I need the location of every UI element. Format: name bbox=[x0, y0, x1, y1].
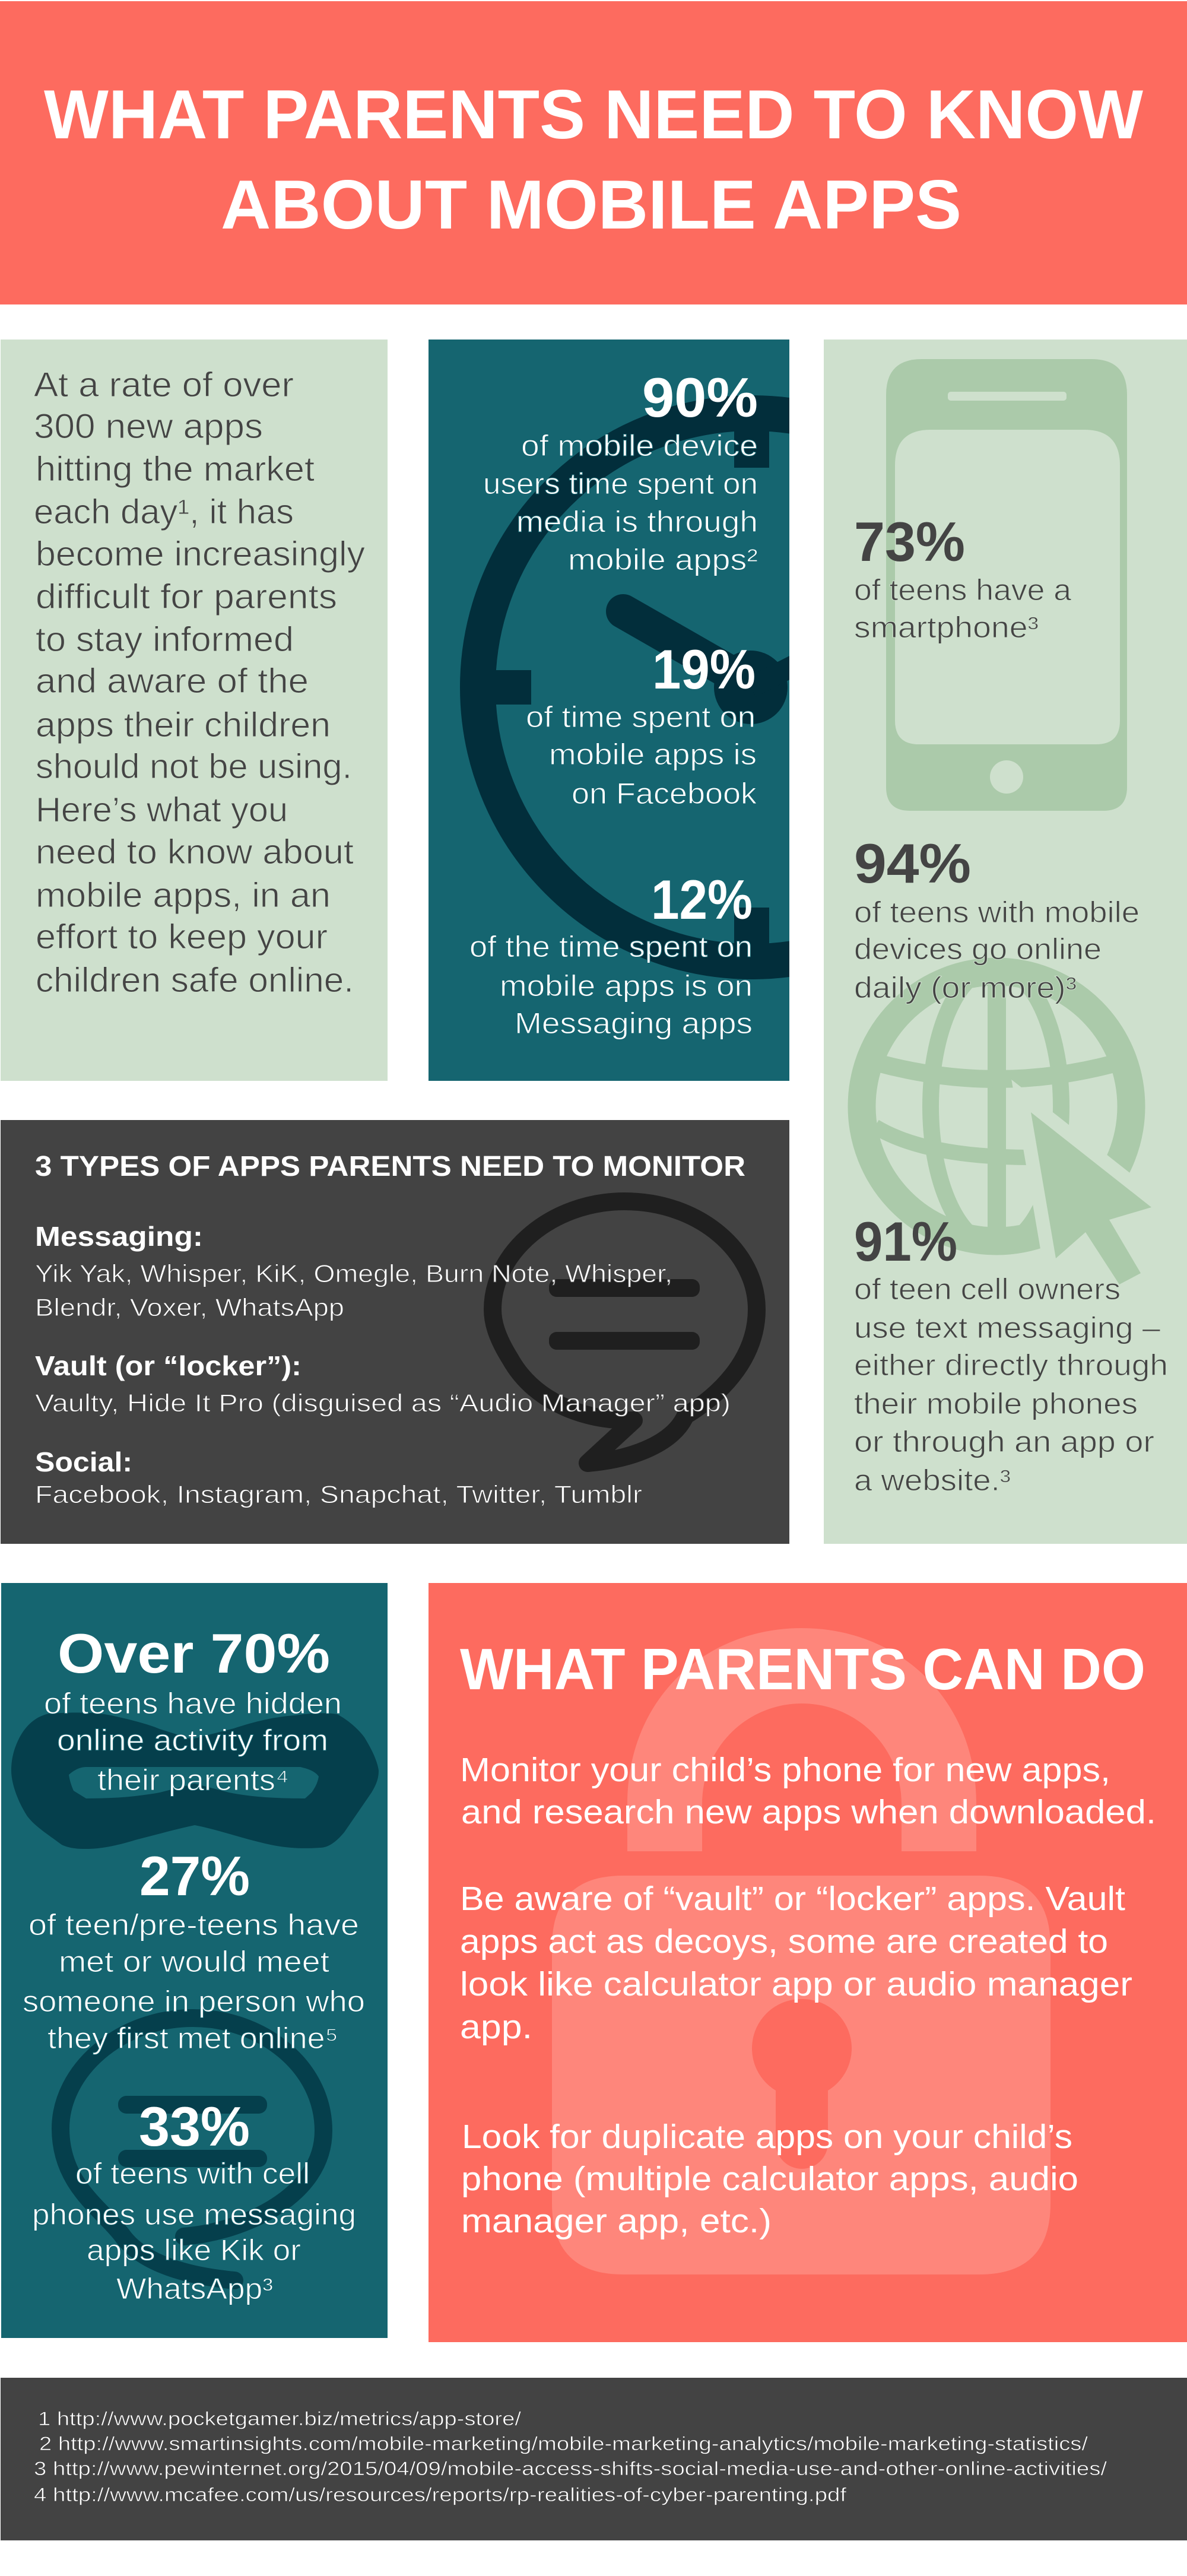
stat: 91 percent bbox=[854, 1210, 1168, 1497]
heading: WHAT PARENTS CAN DO bbox=[460, 1636, 1145, 1702]
stat: 73 percent: 73% bbox=[854, 510, 965, 573]
icon: eye mask bbox=[11, 1712, 379, 1849]
stat: over 70 percent: their parents⁴ bbox=[97, 1763, 289, 1797]
intro text: effort to keep your bbox=[36, 918, 328, 956]
stat: 27 percent: someone in person who bbox=[23, 1985, 365, 2018]
stat: 19 percent: of time spent on bbox=[526, 700, 756, 734]
intro text: mobile apps, in an bbox=[36, 876, 331, 915]
heading: 3 TYPES OF APPS PARENTS NEED TO MONITOR bbox=[35, 1151, 745, 1182]
tip: monitor phone bbox=[460, 1751, 1156, 1831]
app type: messaging bbox=[35, 1221, 672, 1321]
stat: 90 percent: mobile apps² bbox=[568, 543, 758, 576]
stat: 73 percent bbox=[854, 510, 1071, 644]
stat: 27 percent: met or would meet bbox=[59, 1945, 329, 1978]
intro text: At a rate of over bbox=[34, 366, 294, 404]
stat: 19 percent: mobile apps is bbox=[549, 738, 757, 771]
source list: 2 http://www.smartinsights.com/mobile-marketing/mobile-marketing-analytics/mobile-marketing-statistics/ bbox=[39, 2433, 1088, 2454]
app type: social bbox=[35, 1446, 642, 1508]
tip: vault apps: app. bbox=[460, 2008, 532, 2046]
app type: social: Social: bbox=[35, 1446, 132, 1477]
stat: 19 percent: 19% bbox=[652, 638, 756, 700]
stat: 91 percent: use text messaging – bbox=[854, 1311, 1160, 1344]
intro text: should not be using. bbox=[36, 747, 352, 786]
tip: vault apps bbox=[460, 1880, 1132, 2046]
icon: speech bubble bbox=[61, 2018, 323, 2280]
stat: 27 percent bbox=[23, 1845, 365, 2055]
intro text: need to know about bbox=[36, 833, 354, 871]
stat: 27 percent: of teen/pre-teens have bbox=[28, 1908, 359, 1941]
source list: 4 http://www.mcafee.com/us/resources/reports/rp-realities-of-cyber-parenting.pdf bbox=[34, 2484, 846, 2505]
icon: padlock bbox=[552, 1628, 1050, 2274]
stat: 33 percent: phones use messaging bbox=[32, 2198, 356, 2231]
panel: teen usage stats bbox=[824, 340, 1187, 1544]
stat: 91 percent: 91% bbox=[854, 1210, 957, 1273]
source list: 3 http://www.pewinternet.org/2015/04/09/mobile-access-shifts-social-media-use-and-other-online-activities/ bbox=[34, 2458, 1107, 2479]
stat: 94 percent bbox=[854, 832, 1140, 1004]
stat: 94 percent: 94% bbox=[854, 832, 971, 894]
stat: 90 percent bbox=[483, 366, 758, 576]
title: WHAT PARENTS NEED TO KNOW bbox=[44, 75, 1144, 153]
app type: social: Facebook, Instagram, Snapchat, Twitter, Tumblr bbox=[35, 1480, 642, 1508]
intro text: Here’s what you bbox=[36, 791, 288, 829]
tip: duplicate apps: Look for duplicate apps on your child’s bbox=[462, 2118, 1072, 2156]
stat: 12 percent: Messaging apps bbox=[515, 1007, 753, 1040]
stat: 91 percent: their mobile phones bbox=[854, 1387, 1138, 1420]
icon: speech bubble bbox=[493, 1201, 757, 1463]
app type: vault bbox=[35, 1350, 731, 1417]
stat: 27 percent: they first met online⁵ bbox=[47, 2022, 338, 2055]
stat: 33 percent bbox=[32, 2095, 356, 2305]
panel: what parents can do bbox=[429, 1583, 1187, 2342]
tip: monitor phone: Monitor your child’s phone for new apps, bbox=[460, 1751, 1110, 1789]
app type: messaging: Blendr, Voxer, WhatsApp bbox=[35, 1293, 344, 1321]
intro text: children safe online. bbox=[36, 961, 354, 1000]
app type: messaging: Messaging: bbox=[35, 1221, 203, 1252]
stat: 33 percent: WhatsApp³ bbox=[116, 2272, 273, 2305]
source list: 1 http://www.pocketgamer.biz/metrics/app-store/ bbox=[38, 2408, 521, 2429]
stat: 73 percent: of teens have a bbox=[854, 573, 1071, 607]
stat: 12 percent: 12% bbox=[651, 868, 753, 931]
panel: time spent stats bbox=[429, 340, 789, 1081]
stat: 33 percent: apps like Kik or bbox=[87, 2234, 301, 2267]
tip: monitor phone: and research new apps when downloaded. bbox=[461, 1793, 1156, 1831]
stat: 94 percent: of teens with mobile bbox=[854, 896, 1140, 929]
tip: vault apps: Be aware of “vault” or “locker” apps. Vault bbox=[460, 1880, 1125, 1918]
intro text: become increasingly bbox=[36, 535, 365, 573]
stat: 12 percent: of the time spent on bbox=[469, 930, 753, 963]
panel: introduction bbox=[1, 340, 388, 1081]
stat: 12 percent: mobile apps is on bbox=[500, 969, 753, 1003]
tip: duplicate apps bbox=[461, 2118, 1078, 2240]
stat: 27 percent: 27% bbox=[139, 1845, 250, 1907]
stat: 91 percent: or through an app or bbox=[854, 1425, 1154, 1458]
intro text: hitting the market bbox=[36, 450, 315, 488]
app type: vault: Vault (or “locker”): bbox=[35, 1350, 301, 1381]
stat: 12 percent bbox=[469, 868, 753, 1040]
stat: over 70 percent: online activity from bbox=[57, 1724, 328, 1757]
stat: 94 percent: daily (or more)³ bbox=[854, 971, 1077, 1004]
title bbox=[44, 75, 1144, 243]
stat: 91 percent: either directly through bbox=[854, 1349, 1168, 1382]
stat: over 70 percent bbox=[44, 1622, 342, 1797]
stat: over 70 percent: of teens have hidden bbox=[44, 1687, 342, 1720]
header banner bbox=[0, 1, 1187, 304]
intro text: each day¹, it has bbox=[34, 493, 294, 531]
stat: 19 percent bbox=[526, 638, 757, 810]
icon: smartphone bbox=[886, 359, 1127, 811]
stat: 90 percent: media is through bbox=[516, 505, 758, 538]
intro text: apps their children bbox=[36, 706, 331, 744]
intro text bbox=[34, 366, 365, 1000]
icon: globe with cursor bbox=[862, 967, 1151, 1284]
panel: sources footer bbox=[1, 2378, 1187, 2540]
title: ABOUT MOBILE APPS bbox=[221, 166, 961, 243]
source list bbox=[34, 2408, 1107, 2505]
stat: 19 percent: on Facebook bbox=[572, 777, 757, 810]
panel: teen behaviour stats bbox=[1, 1583, 388, 2338]
panel: 3 types of apps bbox=[1, 1120, 789, 1544]
intro text: 300 new apps bbox=[34, 407, 263, 446]
stat: over 70 percent: Over 70% bbox=[58, 1622, 330, 1684]
tip: duplicate apps: phone (multiple calculator apps, audio bbox=[461, 2160, 1078, 2198]
stat: 90 percent: users time spent on bbox=[483, 467, 758, 500]
tip: vault apps: look like calculator app or audio manager bbox=[460, 1965, 1132, 2003]
icon: clock bbox=[460, 395, 789, 979]
stat: 91 percent: of teen cell owners bbox=[854, 1273, 1121, 1306]
tip: duplicate apps: manager app, etc.) bbox=[461, 2202, 772, 2240]
intro text: to stay informed bbox=[36, 620, 294, 659]
app type: vault: Vaulty, Hide It Pro (disguised as “Audio Manager” app) bbox=[35, 1389, 731, 1417]
stat: 91 percent: a website.³ bbox=[854, 1464, 1011, 1497]
stat: 73 percent: smartphone³ bbox=[854, 611, 1039, 644]
intro text: difficult for parents bbox=[36, 578, 337, 616]
stat: 90 percent: of mobile device bbox=[521, 429, 758, 462]
stat: 94 percent: devices go online bbox=[854, 932, 1102, 966]
intro text: and aware of the bbox=[36, 662, 309, 700]
stat: 33 percent: of teens with cell bbox=[75, 2157, 310, 2190]
tip: vault apps: apps act as decoys, some are created to bbox=[460, 1923, 1108, 1960]
stat: 33 percent: 33% bbox=[139, 2095, 250, 2158]
stat: 90 percent: 90% bbox=[642, 366, 758, 429]
app type: messaging: Yik Yak, Whisper, KiK, Omegle, Burn Note, Whisper, bbox=[35, 1260, 672, 1287]
